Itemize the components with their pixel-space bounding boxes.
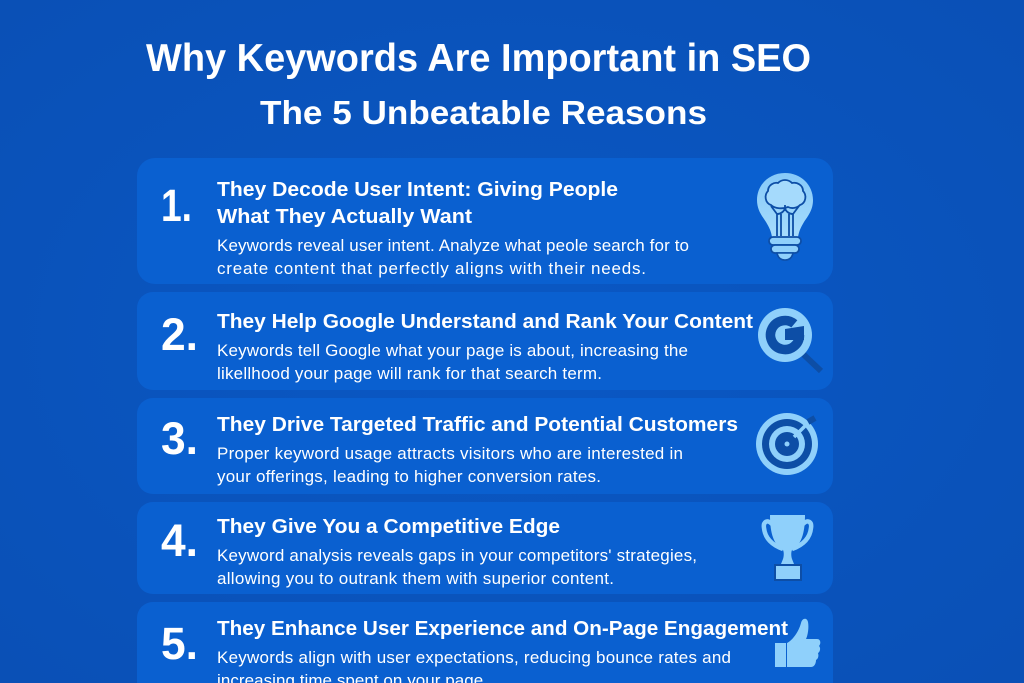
icon: thumbs up xyxy=(775,619,820,667)
heading 1: What They Actually Want xyxy=(217,205,472,228)
panel: reason 5 xyxy=(137,602,833,683)
number 3: 3. xyxy=(161,413,198,464)
heading 4: They Give You a Competitive Edge xyxy=(217,515,560,538)
heading 1: They Decode User Intent: Giving People xyxy=(217,178,618,201)
panel: reason 2 xyxy=(137,292,833,390)
body 1: Keywords reveal user intent. Analyze what peole search for to xyxy=(217,236,689,255)
subtitle: The 5 Unbeatable Reasons xyxy=(260,94,707,131)
body 3 xyxy=(217,444,683,486)
heading 5: They Enhance User Experience and On-Page Engagement xyxy=(217,617,788,640)
heading 1 xyxy=(217,178,618,228)
body 2 xyxy=(217,341,688,383)
body 4: Keyword analysis reveals gaps in your competitors' strategies, xyxy=(217,546,697,565)
body 4 xyxy=(217,546,697,588)
body 5 xyxy=(217,648,731,683)
number 5: 5. xyxy=(161,618,198,669)
body 2: likellhood your page will rank for that search term. xyxy=(217,364,602,383)
number 4: 4. xyxy=(161,515,198,566)
number 2: 2. xyxy=(161,309,198,360)
body 4: allowing you to outrank them with superior content. xyxy=(217,569,614,588)
number 1: 1. xyxy=(161,180,192,231)
heading 2: They Help Google Understand and Rank Your Content xyxy=(217,310,753,333)
panel: reason 4 xyxy=(137,502,833,594)
body 3: Proper keyword usage attracts visitors who are interested in xyxy=(217,444,683,463)
icon: trophy xyxy=(764,515,811,580)
icon: light bulb with brain xyxy=(757,173,813,260)
icon: magnifying glass with G xyxy=(758,308,821,371)
icon: target with dart xyxy=(756,413,818,475)
panel: reason 1 xyxy=(137,158,833,284)
body 2: Keywords tell Google what your page is about, increasing the xyxy=(217,341,688,360)
body 1 xyxy=(217,236,689,278)
body 5: Keywords align with user expectations, reducing bounce rates and xyxy=(217,648,731,667)
heading 3: They Drive Targeted Traffic and Potential Customers xyxy=(217,413,738,436)
panel: reason 3 xyxy=(137,398,833,494)
body 1: create content that perfectly aligns with their needs. xyxy=(217,259,646,278)
title: Why Keywords Are Important in SEO xyxy=(146,37,811,80)
body 3: your offerings, leading to higher conversion rates. xyxy=(217,467,601,486)
